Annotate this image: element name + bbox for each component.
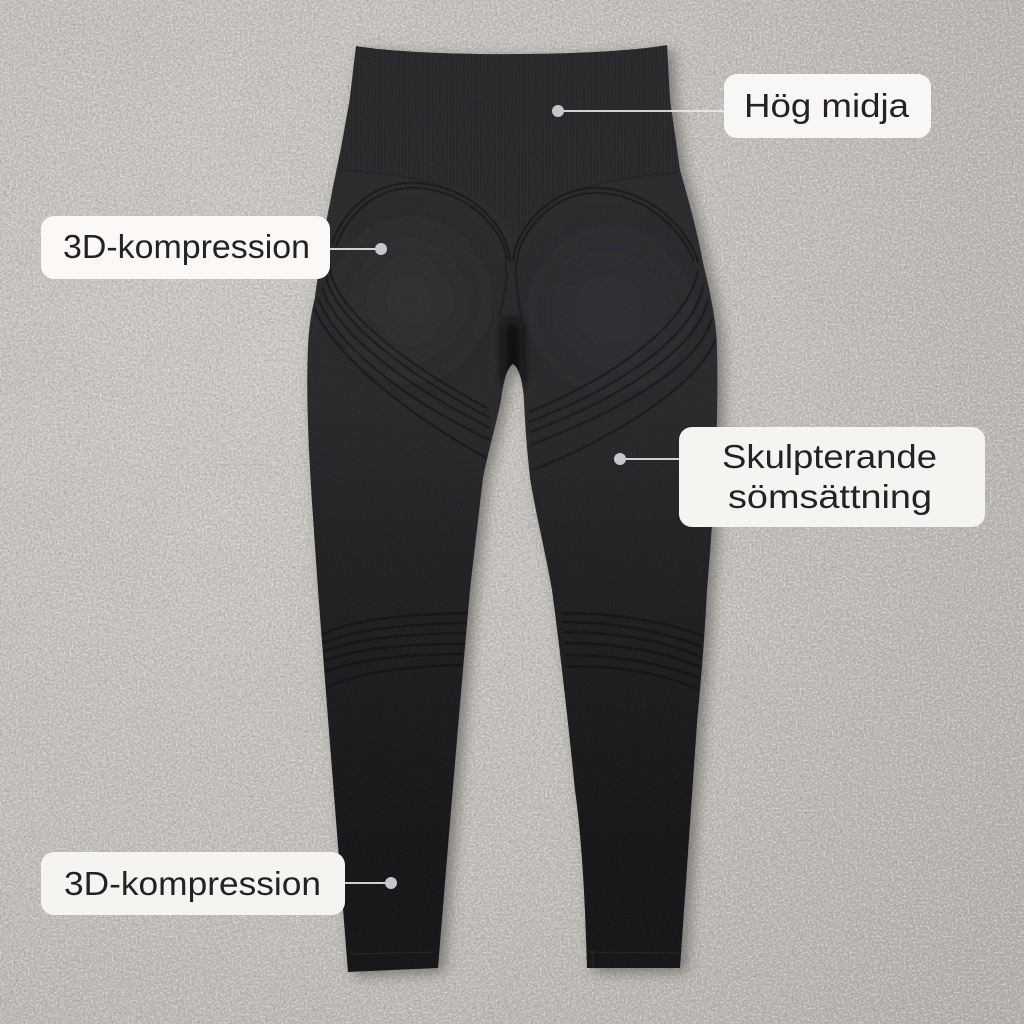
soft fabric highlights (355, 240, 670, 375)
callout: 3D-kompression lower: 3D-kompression (64, 865, 321, 902)
left hip seams (314, 170, 510, 460)
left knee seams (322, 613, 468, 687)
callout: 3D-kompression upper: 3D-kompression (63, 228, 310, 265)
right knee seams (562, 613, 703, 689)
leggings body (290, 30, 730, 990)
crotch shadow (503, 320, 524, 385)
right hip seams (513, 172, 716, 470)
callout: Hög midja: Hög midja (744, 87, 910, 124)
cuff hems (350, 950, 680, 968)
callout: Hög midja (552, 74, 931, 138)
callout: Skulpterande sömsättning (614, 427, 985, 527)
leggings photo illustration (290, 30, 730, 990)
right waist edge (585, 172, 680, 188)
callout: 3D-kompression lower (41, 852, 397, 915)
left waist edge (338, 170, 440, 185)
callout: Skulpterande sömsättning: sömsättning (728, 478, 932, 515)
waistband ribbing (336, 45, 679, 172)
callout: 3D-kompression upper (41, 216, 387, 279)
callout: Skulpterande sömsättning: Skulpterande (722, 438, 937, 475)
fabric knit texture (308, 49, 715, 971)
garment cast shadow (313, 49, 723, 976)
